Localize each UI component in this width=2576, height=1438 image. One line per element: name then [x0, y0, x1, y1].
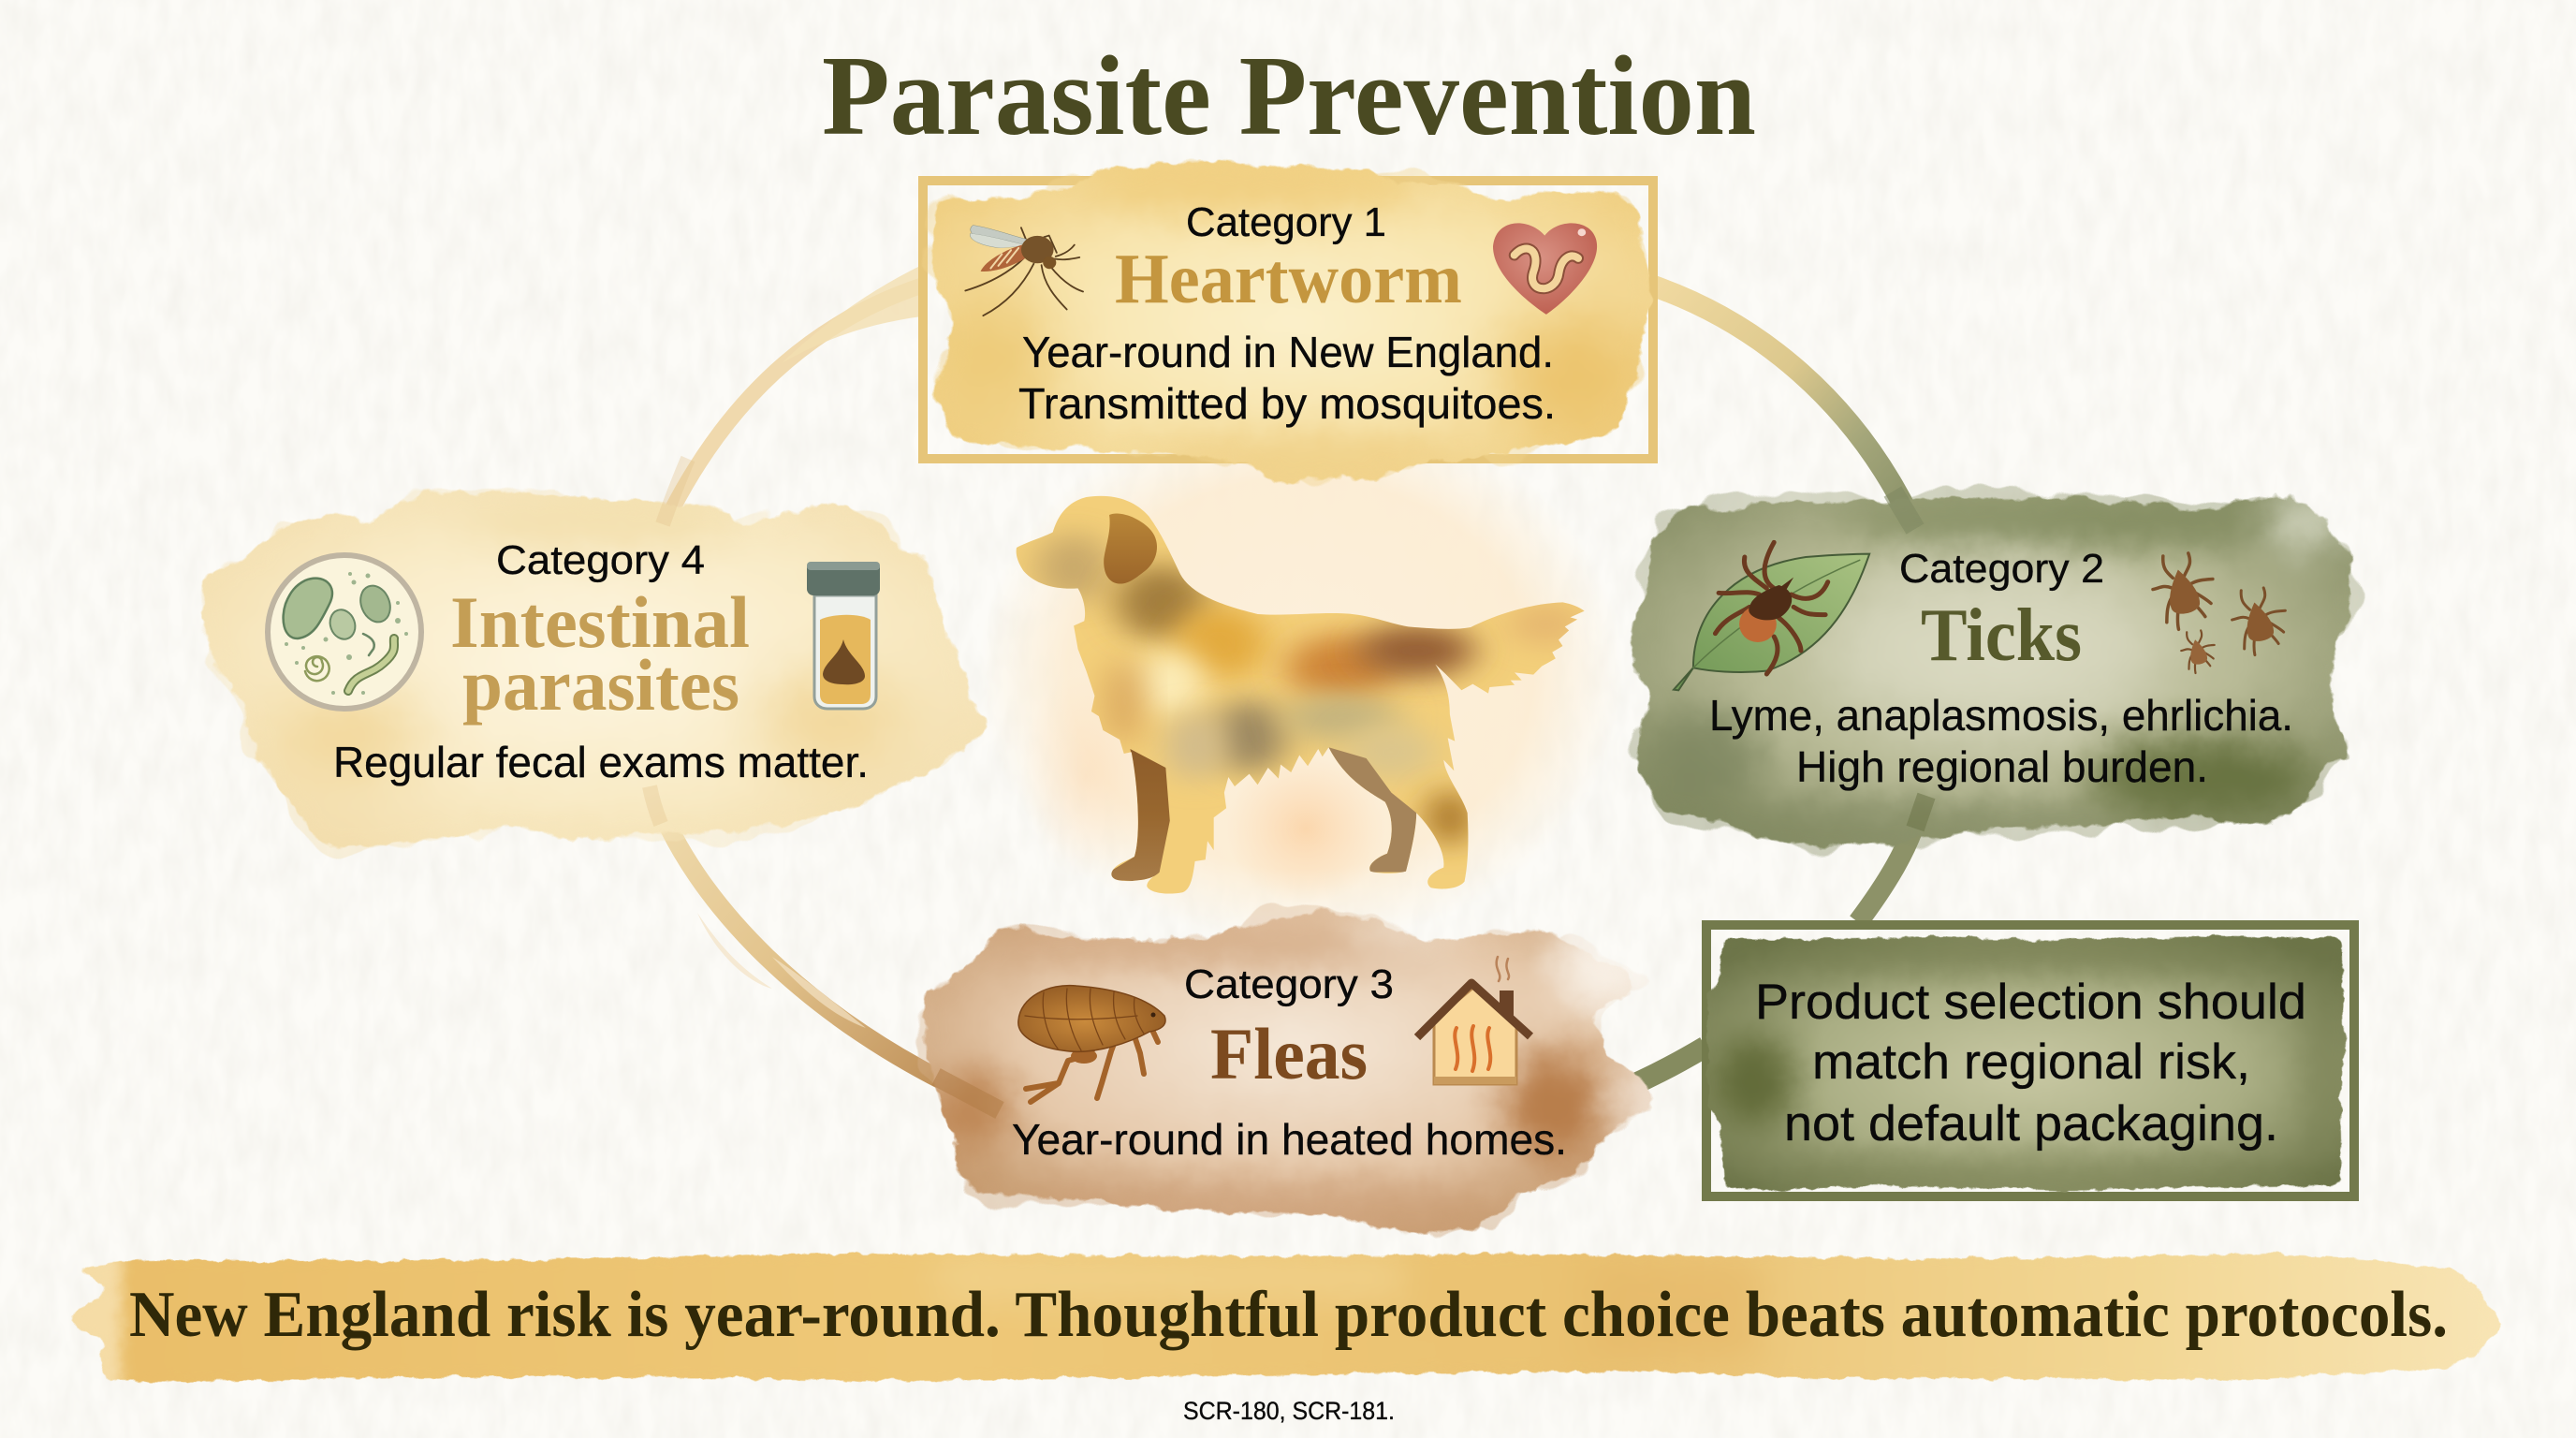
arc overlaps on ticks panel — [1893, 492, 1926, 829]
icon: heart with worm — [1493, 223, 1597, 315]
callout text — [1755, 975, 2306, 1152]
icon: three small ticks — [2146, 547, 2293, 675]
fleas text: Fleas — [1210, 1013, 1368, 1094]
icon: fecal sample vial — [807, 562, 880, 709]
panel: category 2 ticks — [1624, 492, 2359, 852]
ticks text: Category 2 — [1899, 546, 2104, 592]
dog silhouette — [1007, 490, 1592, 899]
panel: category 1 heartworm — [917, 154, 1666, 487]
heartworm text: Category 1 — [1186, 199, 1386, 245]
dog glow — [978, 403, 1624, 946]
callout text: match regional risk, — [1812, 1034, 2250, 1090]
intestinal parasites text: Category 4 — [496, 537, 705, 583]
ticks wash — [1624, 492, 2359, 852]
icon: mosquito — [965, 226, 1083, 315]
banner text: New England risk is year-round. Thoughtful product choice beats automatic protocols. — [129, 1279, 2448, 1351]
icon: petri dish with microbes — [268, 555, 421, 709]
icon: tick on leaf — [1674, 542, 1869, 690]
arc: fleas to callout — [1603, 1047, 1705, 1097]
title: Parasite Prevention — [822, 33, 1756, 159]
panel: category 4 intestinal parasites — [192, 459, 992, 857]
callout: product selection — [1704, 925, 2354, 1198]
arc: heartworm to intestinal parasites — [665, 265, 922, 524]
takeaway banner — [56, 1245, 2518, 1390]
icon: heated house — [1417, 957, 1530, 1084]
intestinal parasites text — [333, 537, 869, 786]
intestinal parasites text: Regular fecal exams matter. — [333, 738, 869, 786]
heartworm text: Heartworm — [1115, 240, 1462, 318]
source citation: SCR-180, SCR-181. — [1183, 1397, 1395, 1425]
ticks text: High regional burden. — [1796, 742, 2208, 791]
intestinal parasites text: Intestinal — [450, 581, 750, 663]
arc: intestinal parasites to fleas — [655, 796, 983, 1100]
fleas text: Category 3 — [1184, 961, 1394, 1007]
intestinal parasites wash — [192, 482, 992, 857]
panel: category 3 fleas — [922, 908, 1683, 1236]
ticks text: Lyme, anaplasmosis, ehrlichia. — [1709, 691, 2293, 740]
connector arcs ring — [655, 265, 1919, 1100]
callout text: Product selection should — [1755, 975, 2306, 1030]
heartworm text — [1018, 199, 1556, 428]
fleas wash — [922, 908, 1683, 1236]
dog ear — [1104, 514, 1157, 584]
heartworm wash — [917, 154, 1666, 487]
heartworm text: Transmitted by mosquitoes. — [1018, 379, 1556, 428]
intestinal parasites text: parasites — [462, 644, 739, 726]
heartworm text: Year-round in New England. — [1022, 328, 1554, 376]
fleas text — [1012, 961, 1567, 1164]
ticks text: Ticks — [1921, 594, 2082, 677]
callout wash — [1704, 932, 2349, 1198]
banner wash — [56, 1245, 2518, 1390]
central dog illustration — [1003, 463, 1597, 919]
callout frame — [1706, 925, 2354, 1196]
icon: flea — [1018, 986, 1165, 1102]
arc overlap on fleas panel — [936, 1077, 1000, 1110]
arc overlaps on intestinal panel — [650, 459, 688, 824]
callout text: not default packaging. — [1784, 1096, 2278, 1152]
fleas text: Year-round in heated homes. — [1012, 1115, 1567, 1164]
arc: heartworm to ticks — [1652, 286, 1910, 517]
arc: ticks to callout — [1858, 810, 1919, 922]
heartworm double frame — [923, 181, 1653, 459]
ticks text — [1709, 546, 2293, 791]
